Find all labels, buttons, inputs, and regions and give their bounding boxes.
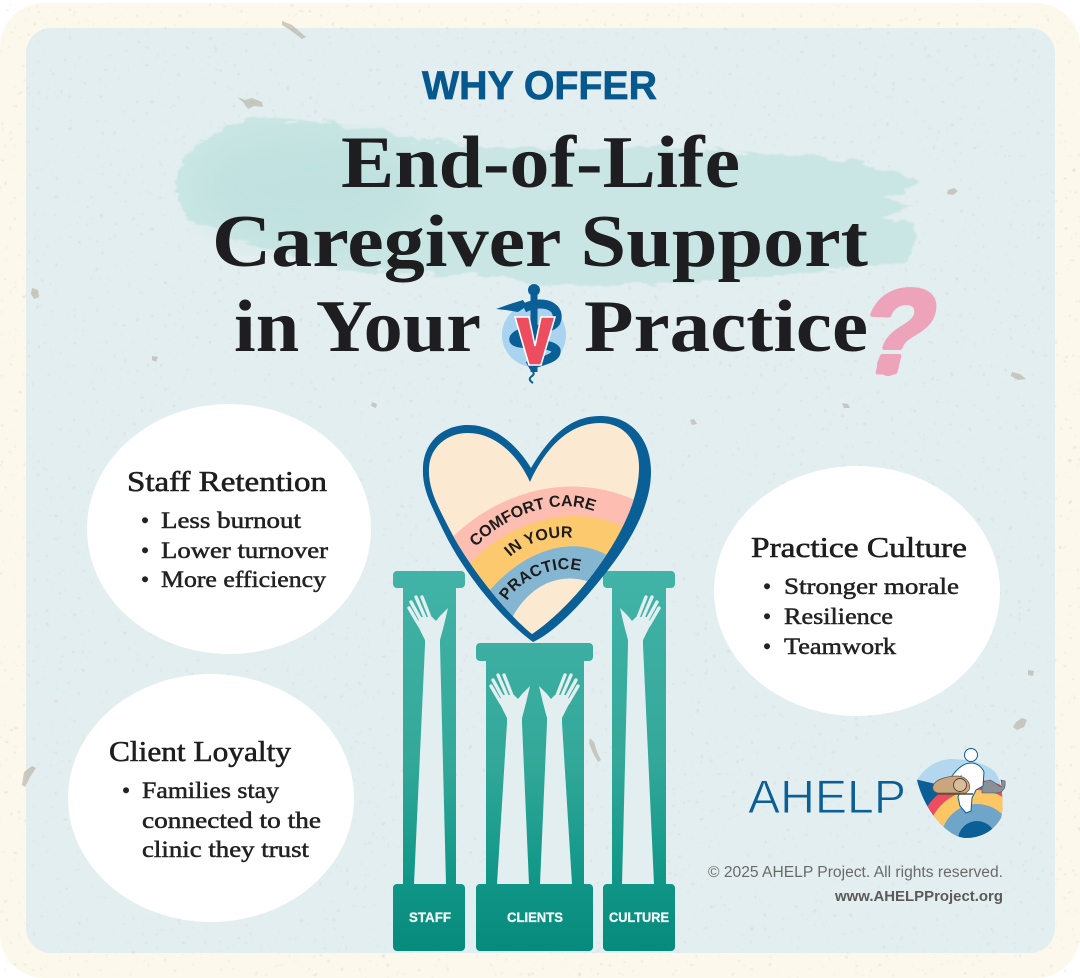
icon: reaching arm xyxy=(409,597,448,884)
heart: comfort care in your practice xyxy=(422,416,651,642)
pillar: culture xyxy=(603,571,675,951)
list: client loyalty: clinic they trust xyxy=(142,837,310,862)
panel: client loyalty xyxy=(68,674,354,922)
logo: AHELP xyxy=(748,748,1006,838)
cat xyxy=(982,780,1005,793)
list: client loyalty: connected to the xyxy=(142,808,321,833)
panel: practice culture xyxy=(714,466,1000,716)
title line 3 end: Practice xyxy=(584,286,868,368)
list: staff retention: • xyxy=(141,508,149,533)
title xyxy=(212,64,868,368)
logo wordmark: AHELP xyxy=(748,770,906,823)
heading: client loyalty: Client Loyalty xyxy=(109,736,292,768)
person xyxy=(952,763,984,813)
list: practice culture: Stronger morale xyxy=(784,574,959,599)
label: culture: CULTURE xyxy=(609,910,669,925)
icon: question mark: ? xyxy=(847,267,951,398)
icon: veterinary caduceus xyxy=(496,284,566,383)
list: practice culture xyxy=(763,574,959,659)
icon: reaching arms xyxy=(491,675,578,884)
logo mark xyxy=(917,748,1006,838)
label: clients: CLIENTS xyxy=(507,910,563,925)
icon: reaching arm xyxy=(620,597,659,884)
list: staff retention: • xyxy=(141,538,149,563)
list: staff retention: • xyxy=(141,567,149,592)
list: practice culture: • xyxy=(763,574,771,599)
list: client loyalty xyxy=(122,778,321,862)
heart text: IN YOUR xyxy=(504,526,572,556)
panel: staff retention xyxy=(87,404,371,654)
copyright: © 2025 AHELP Project. All rights reserved. xyxy=(708,864,1003,881)
website: www.AHELPProject.org xyxy=(834,888,1003,905)
pillars xyxy=(393,571,675,951)
list: client loyalty: • xyxy=(122,778,130,803)
pillar: clients xyxy=(476,643,593,951)
watercolor brush stroke xyxy=(176,118,918,287)
title kicker: WHY OFFER xyxy=(422,64,657,108)
heading: practice culture: Practice Culture xyxy=(751,532,967,564)
paper speckles xyxy=(22,21,1034,787)
heading: staff retention: Staff Retention xyxy=(127,466,328,498)
label: staff: STAFF xyxy=(409,910,451,925)
heart text: COMFORT CARE xyxy=(470,495,596,545)
list: practice culture: Teamwork xyxy=(784,634,897,659)
list: practice culture: Resilience xyxy=(784,604,893,629)
list: practice culture: • xyxy=(763,634,771,659)
list: staff retention: Less burnout xyxy=(161,508,302,533)
title line 1: End-of-Life xyxy=(341,122,740,204)
pillar: staff xyxy=(393,571,465,951)
list: client loyalty: Families stay xyxy=(142,778,280,803)
list: staff retention: Lower turnover xyxy=(161,538,328,563)
dog xyxy=(933,776,970,793)
rainbow bands xyxy=(454,486,634,634)
title line 3 start: in Your xyxy=(234,286,481,368)
list: practice culture: • xyxy=(763,604,771,629)
list: staff retention: More efficiency xyxy=(161,567,327,592)
title line 2: Caregiver Support xyxy=(212,201,868,283)
heart text xyxy=(470,495,596,600)
list: staff retention xyxy=(141,508,328,592)
heart text: PRACTICE xyxy=(498,558,582,600)
